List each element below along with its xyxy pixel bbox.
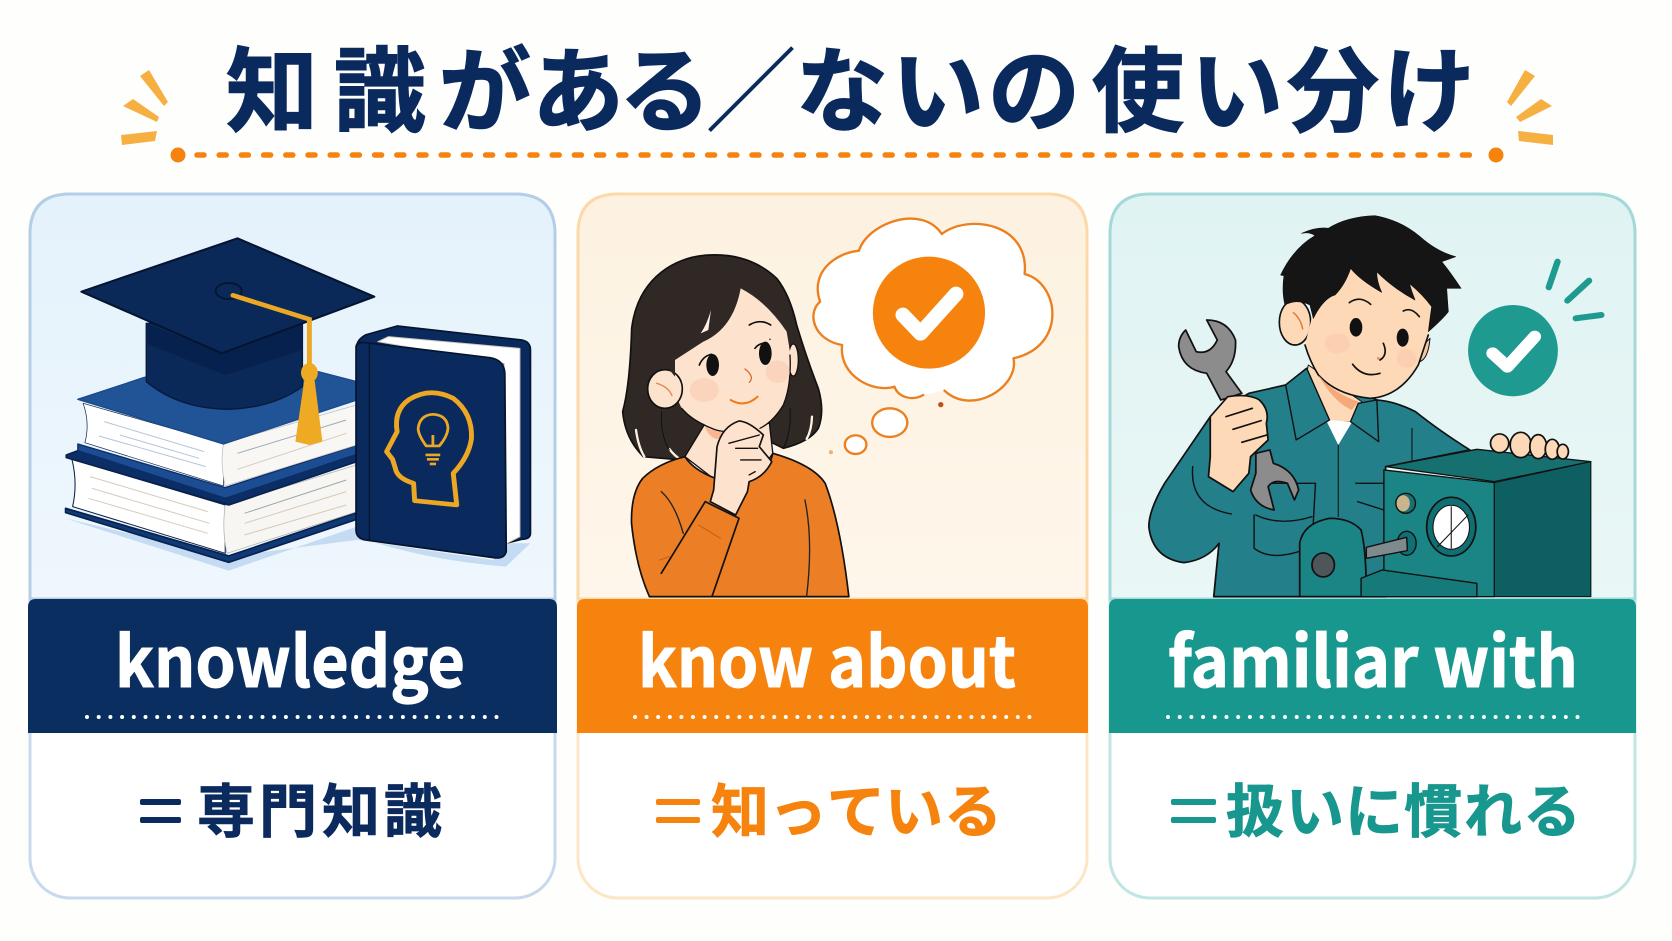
illustration: graduation cap and books [65, 238, 530, 571]
title dotted underline [170, 148, 1504, 162]
term: knowledge: knowledge [115, 607, 465, 708]
panel: knowledge [28, 194, 557, 898]
title: ないの使い分け [796, 18, 1475, 151]
dotted divider: familiar with [1168, 715, 1580, 719]
title [226, 18, 1475, 151]
meaning: 知っている: 知っている [711, 765, 1002, 849]
header band: knowledge [28, 599, 557, 733]
panel: know about [577, 194, 1088, 898]
illustration: woman thinking with thought bubble [623, 219, 1052, 597]
term: familiar with: familiar with [1168, 607, 1578, 708]
title: 知識がある [226, 18, 711, 151]
icon: right sparkle rays [1507, 70, 1553, 145]
panel: familiar with [1109, 194, 1636, 898]
title: ／ [705, 18, 797, 151]
header band: know about [577, 599, 1088, 733]
meaning: 扱いに慣れる: 扱いに慣れる [1226, 765, 1581, 849]
header band: familiar with [1109, 599, 1636, 733]
icon: left sparkle rays [121, 70, 168, 145]
dotted divider: knowledge [87, 715, 499, 719]
dotted divider: know about [635, 715, 1032, 719]
illustration: mechanic with wrench and machine [1149, 216, 1601, 597]
term: know about: know about [638, 607, 1016, 708]
meaning: 専門知識: 専門知識 [197, 765, 442, 849]
